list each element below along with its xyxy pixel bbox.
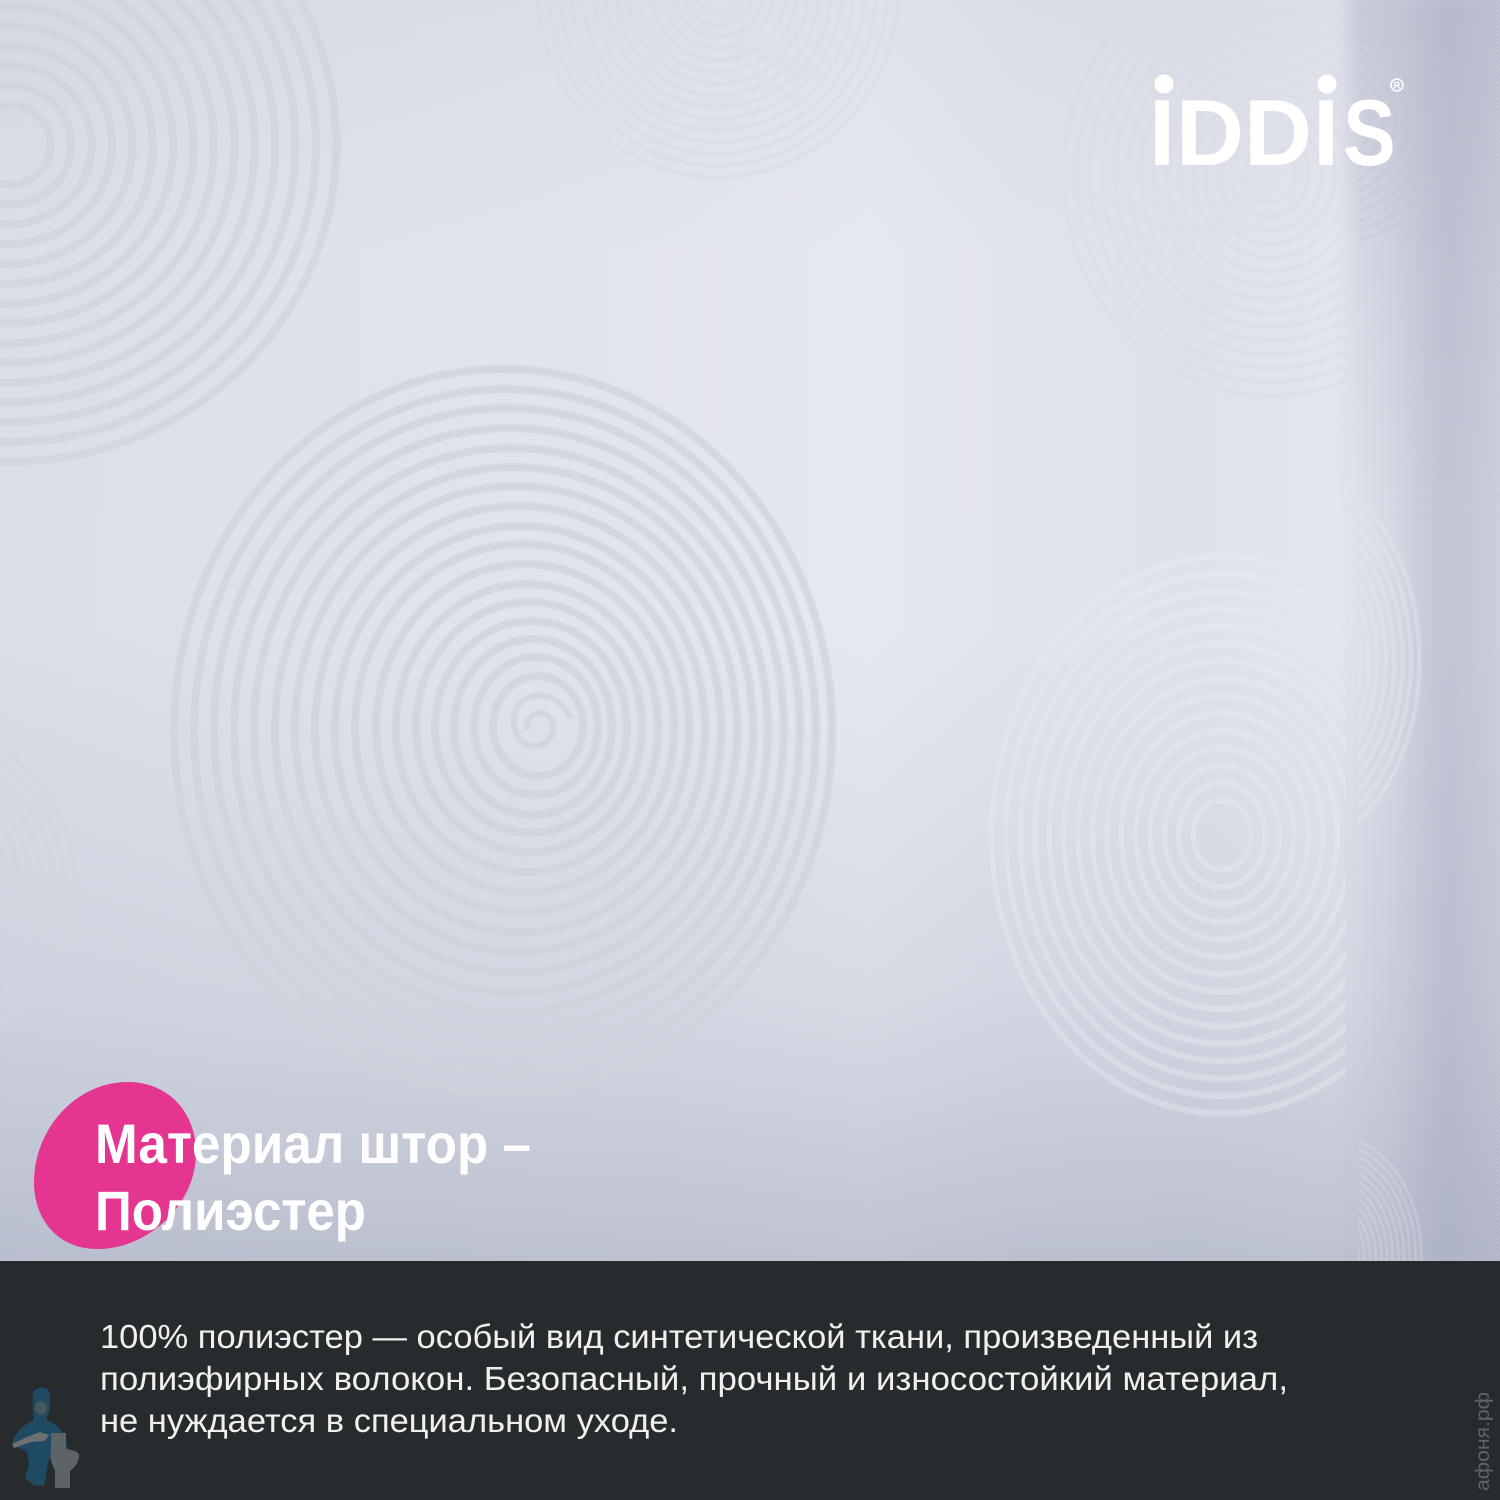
logo: iddis: R <box>1394 80 1401 90</box>
spiral pattern: large centre spiral <box>170 365 836 982</box>
logo: iddis: IDDI <box>1149 80 1339 185</box>
icon: plumber with toilet <box>12 1388 79 1488</box>
body text: 100% полиэстер — особый вид синтетической ткани, произведенный из <box>100 1318 1258 1355</box>
spiral pattern: right fold arcs <box>1380 556 1421 794</box>
title: Материал штор – <box>95 1112 531 1175</box>
spiral pattern: top-right spiral beyond the fold <box>1360 221 1361 222</box>
wrench <box>12 1432 49 1448</box>
title: Полиэстер <box>95 1179 366 1242</box>
watermark: афоня.рф <box>1473 1392 1494 1491</box>
spiral pattern: bottom-right arcs <box>1358 1140 1422 1261</box>
body text: не нуждается в специальном уходе. <box>100 1402 678 1439</box>
spiral pattern: top-centre spiral <box>538 0 898 177</box>
plumber face <box>35 1401 47 1415</box>
title <box>95 1112 531 1242</box>
spiral pattern: top-left spiral <box>0 0 336 462</box>
logo: iddis: S <box>1343 81 1396 186</box>
plumber figure <box>12 1388 69 1486</box>
toilet <box>50 1433 79 1488</box>
body text: полиэфирных волокон. Безопасный, прочный и износостойкий материал, <box>100 1360 1288 1397</box>
spiral pattern: lower-right spiral <box>1004 872 1346 1116</box>
spiral pattern: left-edge spiral <box>0 717 75 1053</box>
spiral pattern: top-right spiral <box>1064 0 1476 396</box>
dark text panel <box>0 1261 1500 1500</box>
pink accent blob <box>34 1082 196 1249</box>
body text <box>100 1318 1288 1439</box>
fabric weave texture <box>1448 1238 1450 1252</box>
